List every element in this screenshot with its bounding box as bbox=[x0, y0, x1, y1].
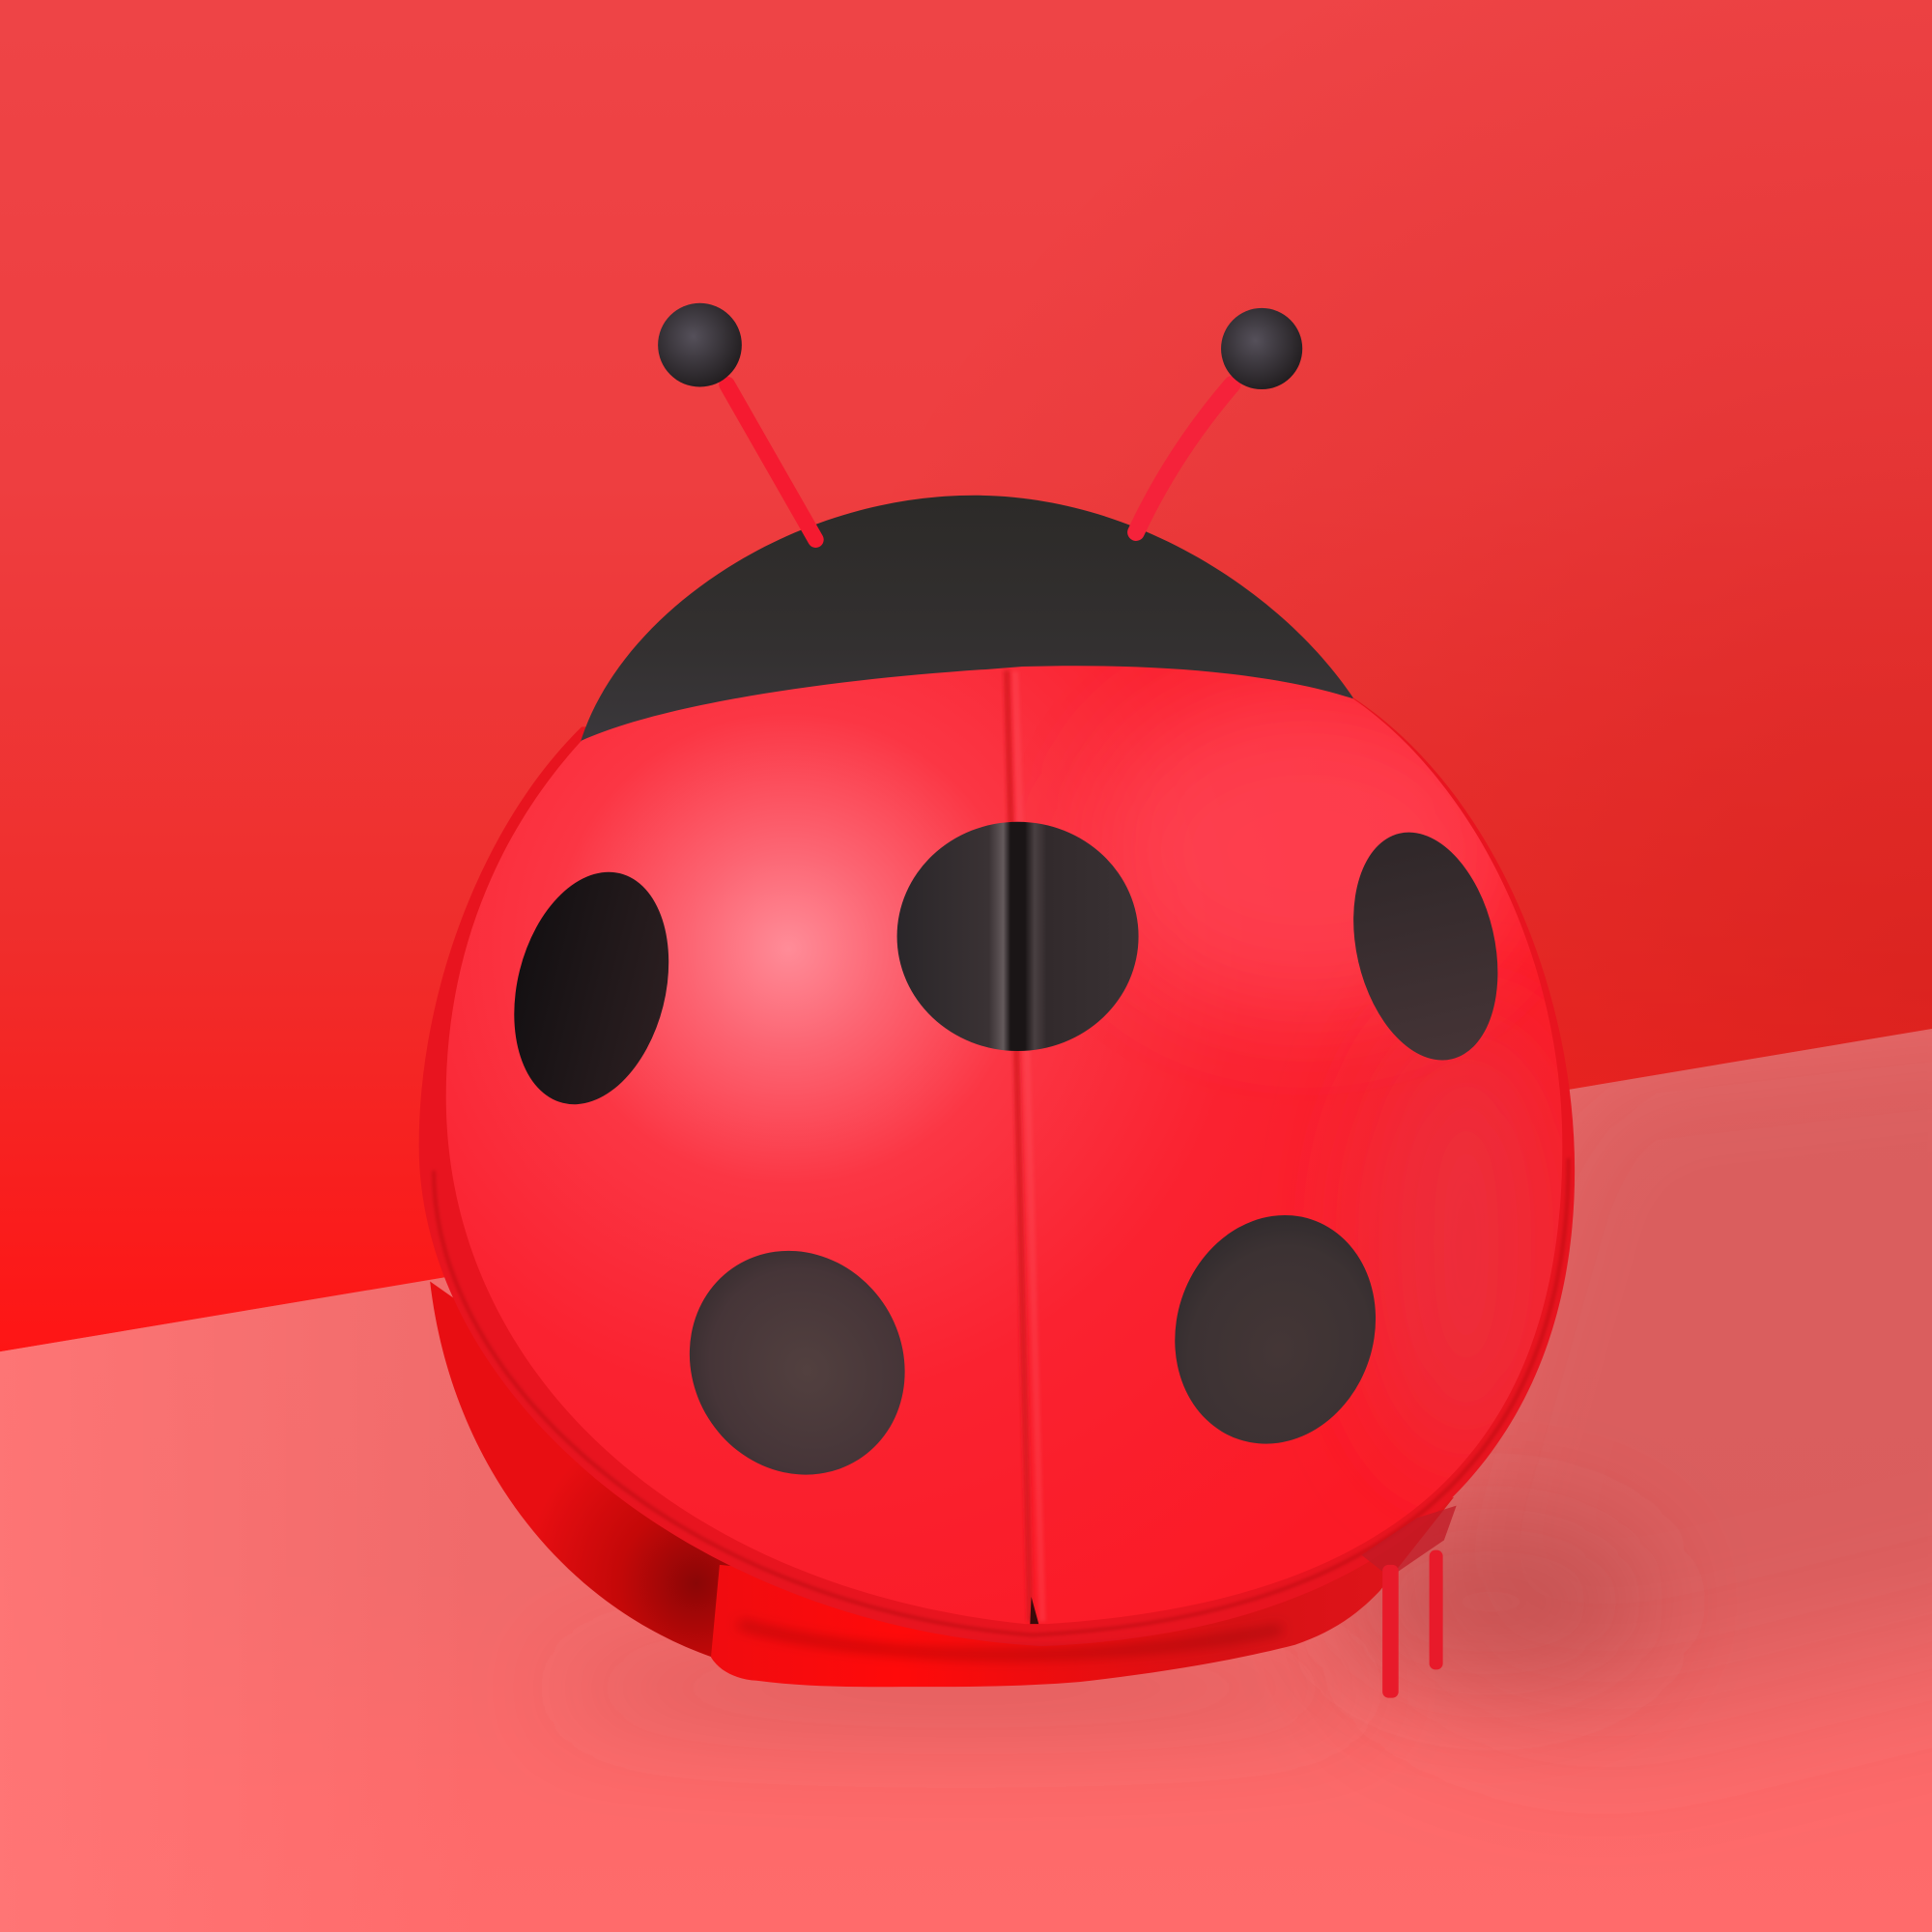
zipper seam bbox=[434, 1158, 1569, 1655]
spot: middle bbox=[897, 822, 1139, 1051]
spot: left bbox=[491, 856, 692, 1121]
shell rim bbox=[419, 697, 1575, 1646]
zipper pulls bbox=[1361, 1506, 1457, 1698]
center seam bbox=[1007, 670, 1042, 1624]
spot: bottom left bbox=[647, 1210, 947, 1516]
shell bbox=[446, 666, 1565, 1624]
backpack lower strap bbox=[711, 1497, 1454, 1687]
floor bbox=[0, 1029, 1932, 1932]
floor shadow bbox=[554, 985, 1932, 1725]
left antenna bbox=[658, 303, 815, 540]
background wall bbox=[0, 0, 1932, 1368]
head bbox=[579, 496, 1355, 747]
right antenna bbox=[1136, 308, 1302, 532]
spot: right bbox=[1332, 818, 1519, 1074]
spot: bottom right bbox=[1146, 1189, 1405, 1470]
backpack left strap bbox=[430, 1282, 739, 1658]
